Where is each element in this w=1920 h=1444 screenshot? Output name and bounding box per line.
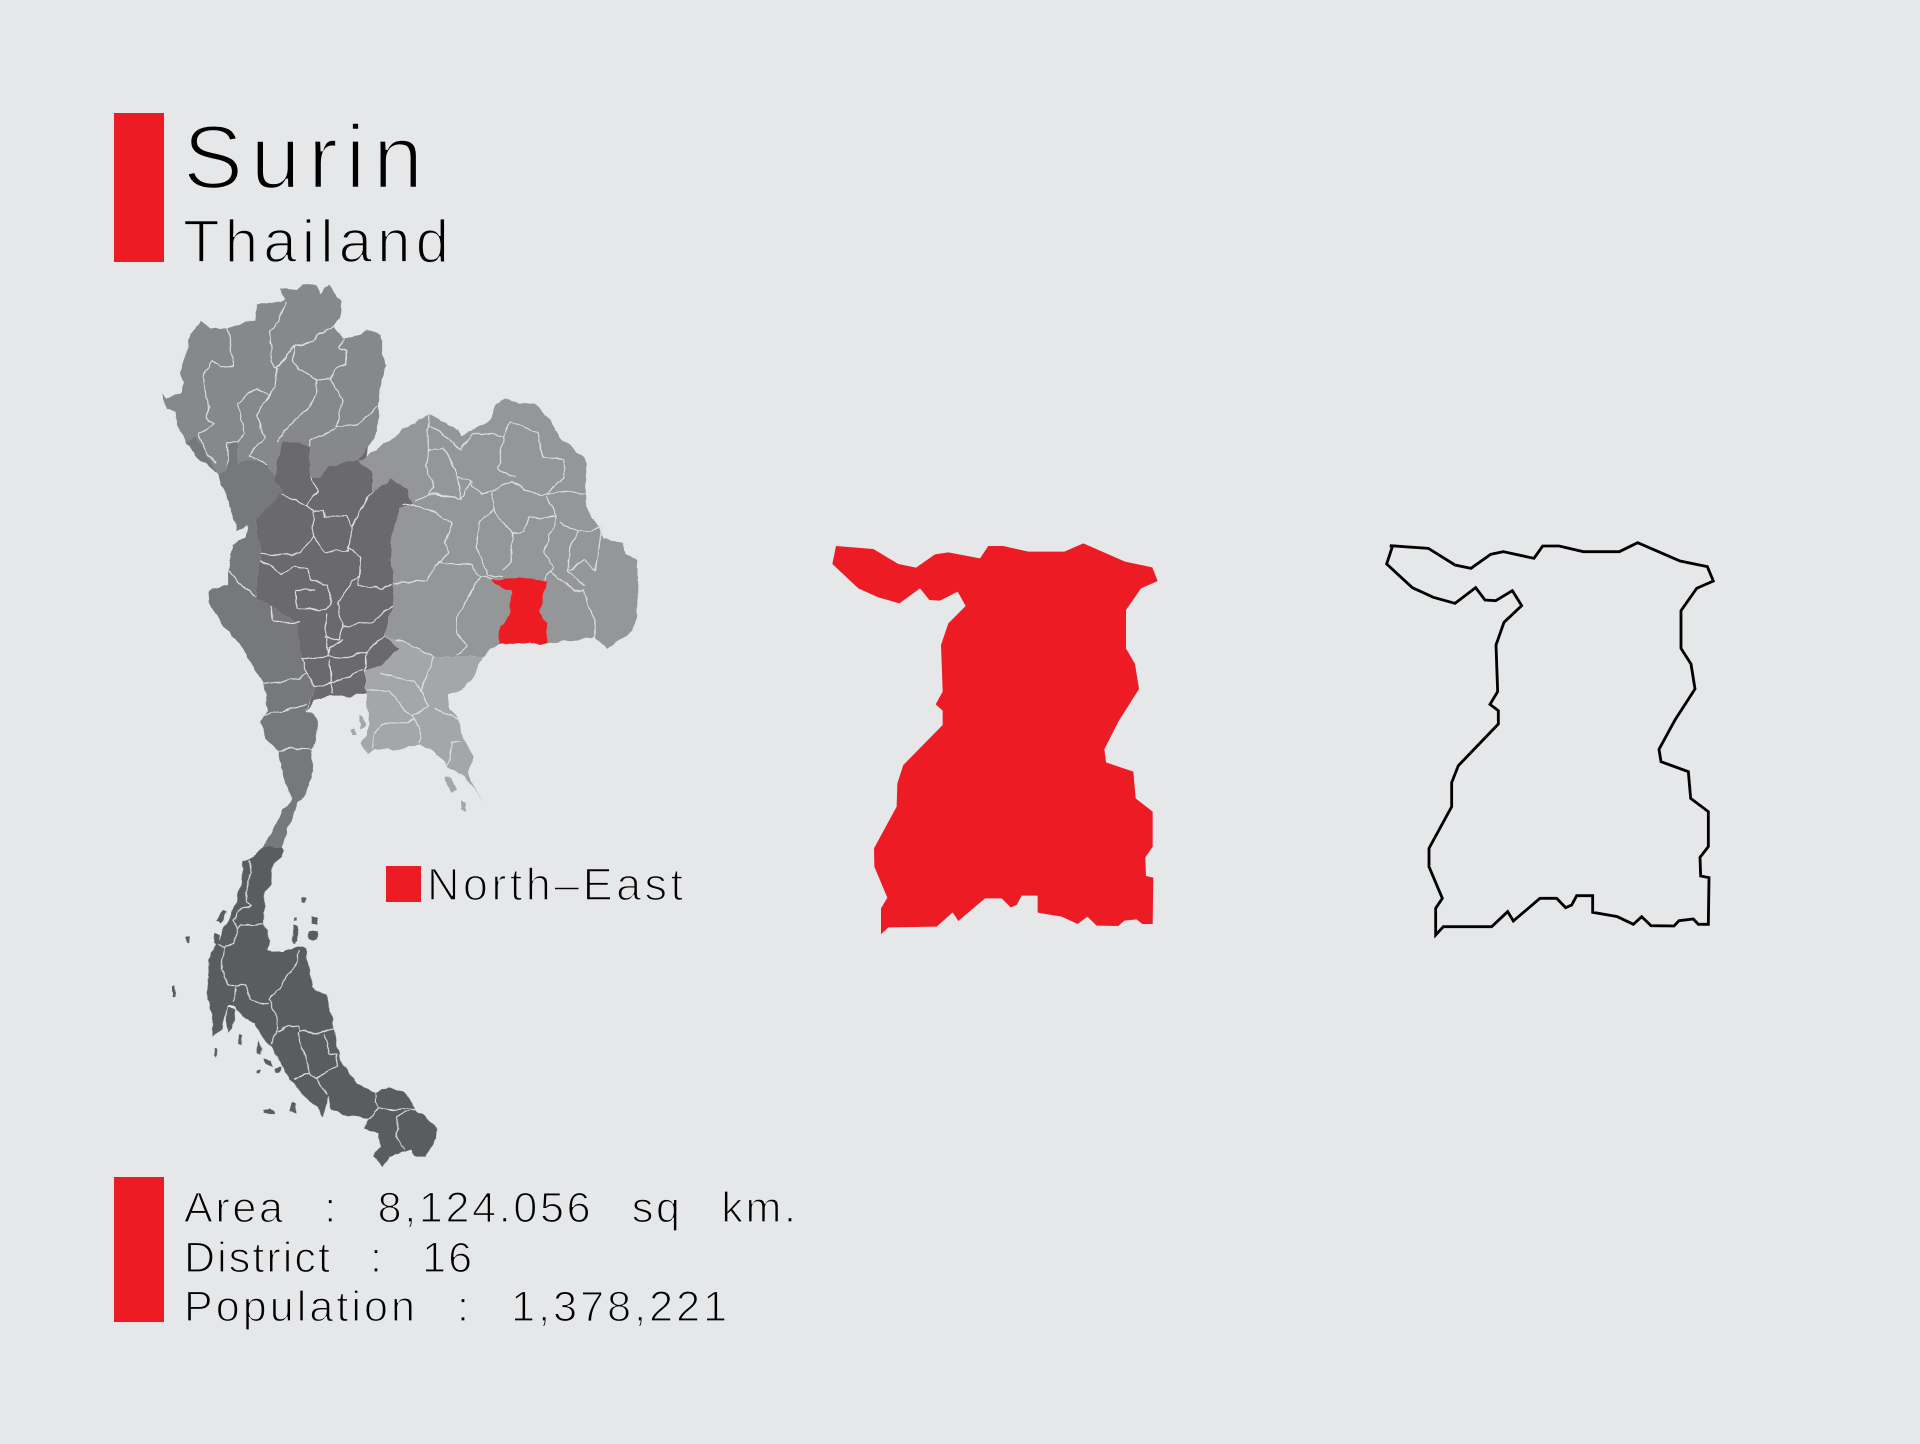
stat: area: Area : 8,124.056 sq km. [184,1184,796,1232]
Surin province outline shape [1387,543,1713,935]
highlighted province: Surin on map [491,578,547,644]
region: central [255,442,412,712]
title: Surin: Surin [183,108,423,208]
Surin province filled shape [832,543,1158,934]
region: east [350,635,484,812]
region: south [172,846,437,1167]
region: west [186,437,318,847]
region: north-east [359,399,637,657]
legend: North-East [386,859,683,910]
title accent bar [114,113,164,262]
region: north [161,283,387,477]
legend label: North–East [427,859,683,910]
subtitle: Thailand: Thailand [183,208,449,275]
legend swatch [386,866,421,902]
stat: population: Population : 1,378,221 [184,1283,727,1331]
statistics block [114,1177,796,1331]
stat: district: District : 16 [184,1234,472,1282]
statistics accent bar [114,1177,164,1322]
map of Thailand by region [161,283,637,1167]
